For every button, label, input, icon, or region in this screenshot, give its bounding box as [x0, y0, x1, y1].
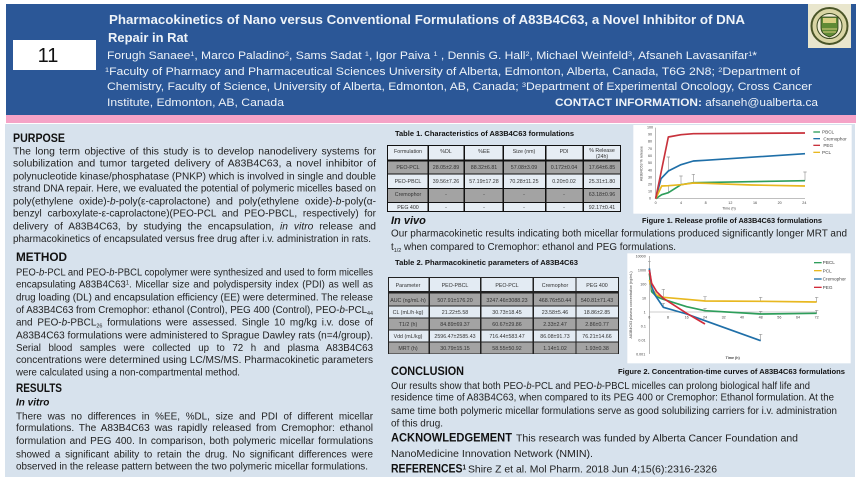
acknowledgement section: ACKNOWLEDGEMENT [391, 433, 512, 445]
figure 1: release profile chart: 70 [648, 147, 652, 151]
table 2: AUC (ng/mL·h) [390, 298, 426, 304]
table 2: 84.89±69.37 [440, 322, 470, 328]
figure 2: concentration-time chart: 32 [722, 315, 726, 319]
acknowledgement section: This research was funded by Alberta Cancer Foundation and [516, 434, 798, 445]
table 2: 23.58±5.46 [542, 310, 568, 316]
table 2: CL (mL/h·kg) [393, 310, 424, 316]
figure 1: release profile chart [633, 125, 852, 214]
figure 2 caption: Figure 2. Concentration-time curves of A83B4C63 formulations [618, 367, 845, 376]
chart legend [813, 130, 847, 155]
figure 1: release profile chart: 10 [648, 190, 652, 194]
method section: concentrations were determined using LC/MS/MS. Pharmacokinetic parameters [16, 355, 373, 366]
table 2: 540.81±71.43 [581, 298, 613, 304]
table 1: %EE [478, 149, 490, 155]
purpose section: solubilization and tumor targeted delivery of A83B4C63, a novel inhibitor of [13, 159, 376, 170]
figure 2: concentration-time chart: 72 [815, 315, 819, 319]
authors: Forugh Sanaee 1, Marco Paladino 2, Sams Sadat 1, Igor Paiva 1 , Dennis G. Hall 2, Michael Weinfeld 3, Afsaneh Lavasanifar 1* [107, 50, 758, 62]
chart legend: PCL [823, 268, 832, 273]
results section: showed a significant ability to retain the drug. No significant differences were [16, 449, 373, 460]
references section [391, 464, 717, 476]
figure 1: release profile chart: 50 [648, 161, 652, 165]
affiliations: Chemistry, Faculty of Science, University of Alberta, Edmonton, AB, Canada; 3Department of Experimental Oncology, Cross Cancer [107, 81, 812, 93]
table 1: - [483, 205, 485, 211]
acknowledgement section: NanoMedicine Innovation Network (NMIN). [391, 449, 593, 460]
table 1: - [523, 192, 525, 198]
affiliations: Institute, Edmonton, AB, Canada [107, 97, 285, 109]
chart legend: PCL [822, 150, 831, 155]
purpose section: The long term objective of this study is to develop nanodelivery systems for [13, 147, 377, 158]
figure 1: release profile chart: 20 [648, 182, 652, 186]
affiliations: 1Faculty of Pharmacy and Pharmaceutical Sciences University of Alberta, Edmonton, Alberta, Canada, T6G 2N8; 2Department of [105, 66, 801, 78]
method section: PEO-b-PCL and PEO-b-PBCL copolymer were synthesized and used to form micelles [16, 268, 373, 279]
purpose section: strand DNA repair. Here, we evaluated the potential of polymeric micelles based on [13, 183, 376, 194]
table 2: MRT (h) [398, 346, 418, 352]
chart legend: PBCL [822, 130, 835, 135]
figure 2: concentration-time chart: 48 [759, 315, 763, 319]
table 2: 2596.47±2585.43 [434, 334, 476, 340]
method section: METHOD [16, 252, 67, 264]
poster number box: 11 [38, 45, 58, 67]
figure 2: concentration-time chart: A83B4C63 plasma concentration (ng/mL) [629, 271, 633, 339]
figure 2: concentration-time chart: 1000 [638, 268, 646, 272]
icon: university crest logo [808, 4, 851, 48]
conclusion section [391, 366, 837, 429]
table 1: 0.20±0.02 [552, 179, 576, 185]
table 1: Size (nm) [513, 149, 536, 155]
table 1: 28.05±2.89 [433, 165, 459, 171]
panel: content background [5, 124, 855, 477]
figure 2: concentration-time chart: 40 [740, 315, 744, 319]
figure 2: concentration-time chart: 56 [777, 315, 781, 319]
table 1: - [523, 205, 525, 211]
table 1: PDI [560, 149, 568, 155]
figure 2: concentration-time chart: Time (h) [726, 356, 741, 360]
poster number box [13, 40, 96, 70]
conclusion section: of this drug. [391, 418, 443, 429]
method section: A83B4C63 formulations were administered to Sprague Dawley rats (n=4/group). [16, 330, 373, 341]
figure 1: release profile chart: A83B4C63 % release [639, 146, 643, 181]
conclusion section: Our results show that both PEO-b-PCL and PEO-b-PBCL micelles can prolong biological half life and [391, 381, 810, 392]
chart legend [814, 260, 846, 290]
table 2: 86.08±91.73 [540, 334, 570, 340]
purpose section: delivery of A83B4C63, by studying the encapsulation, in vitro release and [13, 221, 376, 232]
table 1: 92.17±0.41 [589, 205, 615, 211]
results section: There was no differences in %EE, %DL, size and PDI of different micellar [16, 412, 374, 423]
figure 2: concentration-time chart: 0.01 [638, 338, 646, 342]
figure 1: release profile chart: 8 [705, 201, 707, 205]
results section: formulation and PEG 400. In comparison, both polymeric micellar formulations [16, 436, 373, 447]
table 2: 468.76±50.44 [539, 298, 571, 304]
figure 2: concentration-time chart: 10000 [636, 254, 646, 258]
method section: were calculated using a non-compartmental method. [15, 368, 240, 379]
figure 1: release profile chart: 4 [680, 201, 682, 205]
figure 2: concentration-time chart: 1 [644, 310, 646, 314]
purpose section [13, 133, 377, 245]
figure 1: release profile chart: 16 [753, 201, 757, 205]
chart legend: PBCL [823, 260, 835, 265]
purpose section: benzyl carboxylate-ε-caprolactone)(PEO-PCL and PEO-PBCL, respectively) for [13, 209, 377, 220]
results section: observed in the release pattern between the two polymeric micellar formulations. [16, 462, 368, 473]
figure 2: concentration-time chart: 24 [703, 315, 707, 319]
method section: encapsulating A83B4C631. Micellar size and polydispersity index (PDI) as well as [16, 280, 373, 291]
table 2: 2.86±0.77 [585, 322, 609, 328]
in vivo results: In vivo [391, 215, 426, 227]
table 2: 18.86±2.85 [584, 310, 610, 316]
table 1: 17.64±6.85 [589, 165, 615, 171]
conclusion section: same time both polymeric micellar formulations serve as good solubilizing carriers for i.v. administration [391, 406, 837, 417]
table 1: - [445, 192, 447, 198]
table 2: 30.79±15.15 [440, 346, 470, 352]
chart legend: Cremophor [823, 277, 846, 282]
method section: and PEO-b-PBCL26 formulations were assessed. Single 10 mg/kg i.v. dose of [16, 318, 373, 329]
figure 1: release profile chart: 90 [648, 133, 652, 137]
figure 1: release profile chart: 40 [648, 168, 652, 172]
chart legend: PEG [823, 285, 833, 290]
figure 2: concentration-time chart: 0 [648, 315, 650, 319]
figure 1: release profile chart: 20 [778, 201, 782, 205]
table 1: 39.56±7.26 [433, 179, 459, 185]
table 1 heading: Table 1. Characteristics of A83B4C63 formulations [395, 129, 574, 138]
table 2: Cremophor [542, 283, 568, 289]
references section: REFERENCES1 [391, 464, 466, 476]
purpose section: pharmacokinetics of encapsulated versus free drug after i.v. administration in rats. [13, 234, 371, 245]
table 2: 76.21±14.66 [582, 334, 612, 340]
table 1: %DL [440, 149, 452, 155]
conclusion section: residence time of A83B4C63, when compared to its PEG 400 or Cremophor: Ethanol formulation. At the [391, 393, 834, 404]
table 1: % Release [589, 148, 615, 154]
method section [15, 252, 373, 379]
method section: drug loading (DL) and encapsulation efficiency (EE) were determined. The release [16, 293, 373, 304]
table 1: - [563, 205, 565, 211]
method section: of A83B4C63 from Cremophor: ethanol (Control), PEG 400 (Control), PEO-b-PCL44 [16, 305, 373, 316]
figure 1: release profile chart: 80 [648, 140, 652, 144]
chart legend: PEG [823, 143, 834, 148]
in vivo results: t1/2 when compared to Cremophor: ethanol and PEG formulations. [391, 242, 676, 254]
figure 2: concentration-time chart: 8 [667, 315, 669, 319]
figure 1: release profile chart: 0 [649, 197, 651, 201]
table 1: 88.32±6.81 [471, 165, 497, 171]
figure 1: release profile chart: 0 [655, 201, 657, 205]
table 1: 70.28±11.25 [509, 179, 539, 185]
table 2: PEG 400 [586, 283, 608, 289]
table 1: 57.19±17.28 [469, 179, 499, 185]
table 1: Cremophor [395, 192, 421, 198]
table 2 heading: Table 2. Pharmacokinetic parameters of A83B4C63 [395, 258, 578, 267]
figure 1: release profile chart: 100 [647, 126, 653, 130]
title: Pharmacokinetics of Nano versus Conventional Formulations of A83B4C63, a Novel Inhibitor of DNA [109, 13, 745, 27]
table 2 [388, 277, 619, 354]
in vivo results [391, 215, 847, 254]
table 2: 1.93±0.38 [585, 346, 609, 352]
table 1: 63.18±0.96 [589, 192, 615, 198]
table 2: Vdd (mL/kg) [394, 334, 423, 340]
results section [16, 383, 374, 473]
table 2: 3247.46±3088.23 [486, 298, 528, 304]
table 1: (24h) [596, 154, 608, 160]
results section: In vitro [16, 398, 49, 409]
table 1: - [563, 192, 565, 198]
table 2: 1.14±1.02 [543, 346, 567, 352]
results section: RESULTS [16, 383, 62, 395]
purpose section: polynucleotide kinase/phosphatase (PNKP) which is involved in single and double [13, 172, 376, 183]
title [108, 13, 745, 45]
contact information: CONTACT INFORMATION: afsaneh@ualberta.ca [555, 97, 819, 109]
table 1: PEO-PBCL [395, 179, 421, 185]
table 2: PEO-PCL [495, 283, 519, 289]
table 1: 57.08±3.09 [511, 165, 537, 171]
in vivo results: Our pharmacokinetic results indicating both micellar formulations produced significantly longer MRT and [391, 229, 847, 240]
panel: header banner [6, 4, 856, 123]
figure 2: concentration-time chart: 64 [796, 315, 800, 319]
table 2: PEO-PBCL [442, 283, 468, 289]
table 2: 60.67±29.86 [492, 322, 522, 328]
figure 2: concentration-time chart: 16 [685, 315, 689, 319]
table 1: Formulation [394, 149, 422, 155]
purpose section: poly(ethylene oxide)-b-poly(ε-caprolactone) and poly(ethylene oxide)- b-poly(α- [13, 196, 376, 207]
figure 1: release profile chart: 30 [648, 175, 652, 179]
figure 2: concentration-time chart [627, 253, 851, 363]
conclusion section: CONCLUSION [391, 366, 464, 378]
affiliations [105, 66, 812, 109]
purpose section: PURPOSE [13, 133, 65, 145]
acknowledgement section [391, 433, 798, 460]
figure 1: release profile chart: 24 [802, 201, 806, 205]
table 1: 25.31±1.80 [589, 179, 615, 185]
figure 1: release profile chart: Time (h) [722, 206, 736, 210]
table 1 [387, 145, 621, 212]
table 2: 58.55±50.92 [492, 346, 522, 352]
figure 2: concentration-time chart: 100 [640, 282, 646, 286]
table 1: - [445, 205, 447, 211]
figure 2: concentration-time chart: 10 [642, 296, 646, 300]
table 2: 30.73±18.45 [492, 310, 522, 316]
table 2: 716.44±583.47 [489, 334, 525, 340]
table 2: 21.22±5.58 [442, 310, 468, 316]
table 2: Parameter [396, 283, 421, 289]
method section: Serial blood samples were collected up to 72 h and plasma A83B4C63 [16, 343, 373, 354]
figure 2: concentration-time chart: 0.001 [636, 352, 645, 356]
figure 1 caption: Figure 1. Release profile of A83B4C63 formulations [642, 216, 822, 225]
table 1: - [483, 192, 485, 198]
table 2: T1/2 (h) [399, 322, 418, 328]
title: Repair in Rat [108, 31, 189, 45]
table 2: 507.91±176.20 [437, 298, 473, 304]
table 1: PEO-PCL [396, 165, 420, 171]
table 1: 0.172±0.04 [551, 165, 577, 171]
results section: formulations. The A83B4C63 was rapidly released from Cremophor: ethanol [16, 423, 373, 434]
chart legend: Cremophor [823, 136, 847, 141]
table 1: PEG 400 [397, 205, 419, 211]
figure 1: release profile chart: 12 [728, 201, 732, 205]
references section: Shire Z et al. Mol Pharm. 2018 Jun 4;15(6):2316-2326 [468, 465, 717, 476]
figure 1: release profile chart: 60 [648, 154, 652, 158]
table 2: 2.33±2.47 [543, 322, 567, 328]
figure 2: concentration-time chart: 0.1 [641, 324, 646, 328]
